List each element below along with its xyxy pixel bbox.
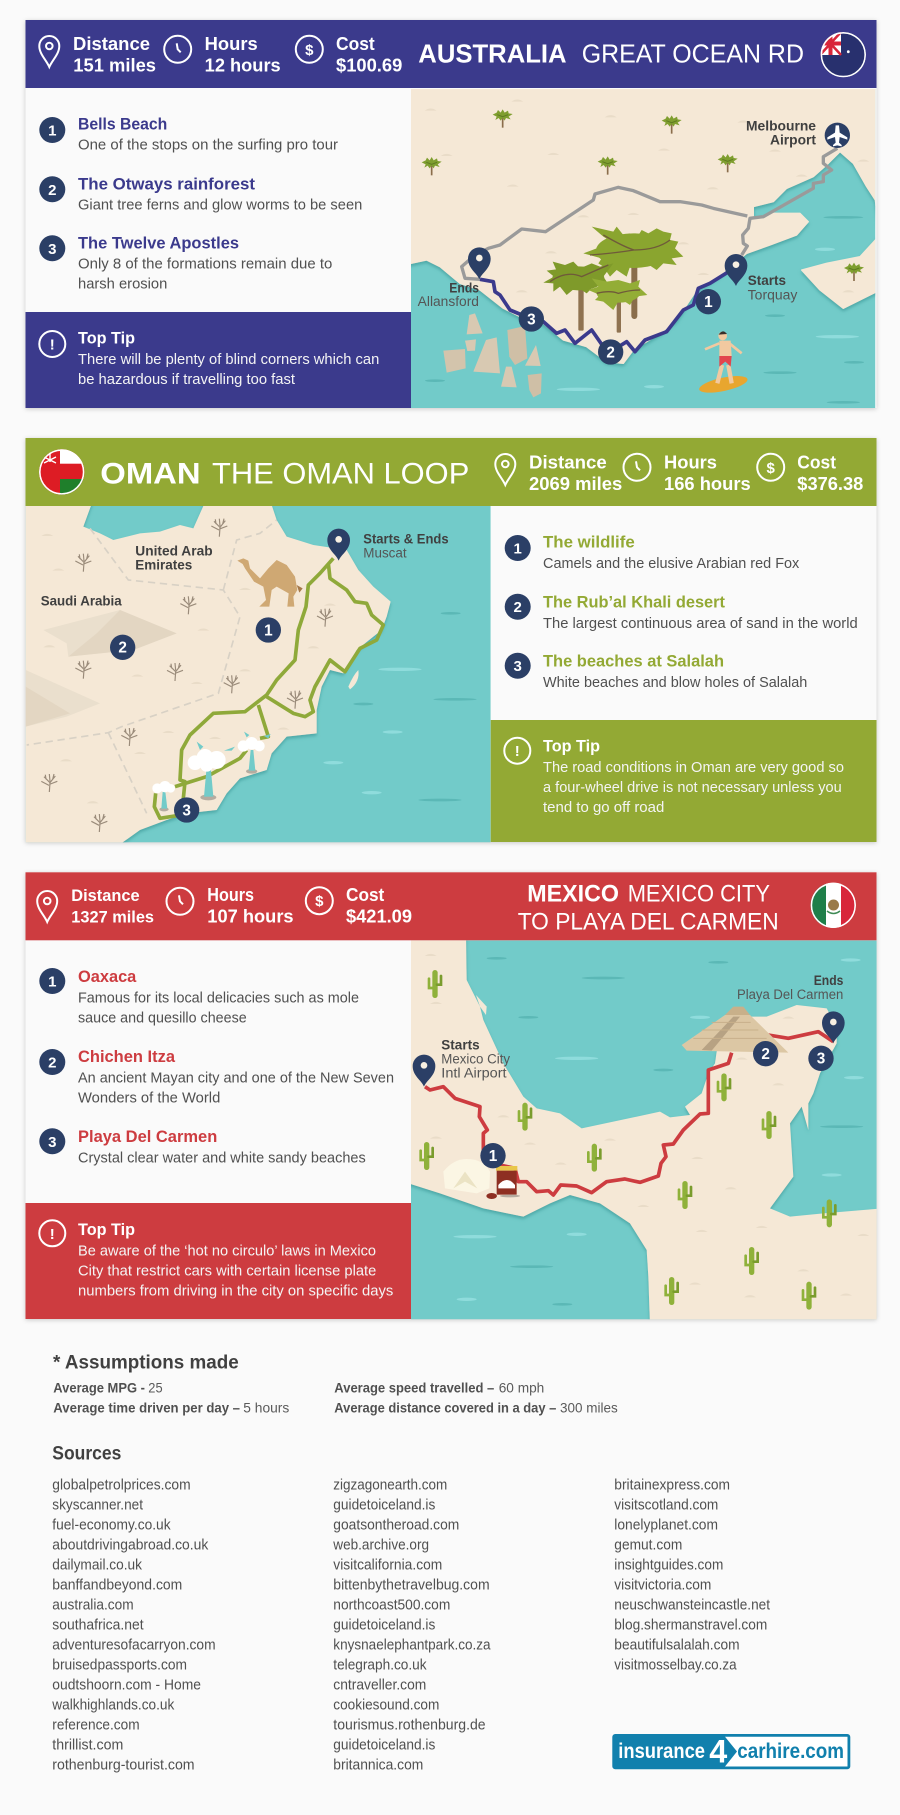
pin: Ends Allansford	[468, 247, 491, 279]
assumption: time driven: Average time driven per day –	[53, 1400, 240, 1416]
sources column 2: web.archive.org	[332, 1537, 429, 1553]
title	[518, 881, 779, 936]
stop 2	[39, 1048, 394, 1106]
illustration: cheese and mole jar	[443, 1159, 520, 1199]
stop 1: Camels and the elusive Arabian red Fox	[543, 556, 800, 572]
top tip: numbers from driving in the city on specific days	[78, 1283, 393, 1299]
flag: Oman	[39, 449, 84, 495]
sources column 2	[332, 1477, 491, 1773]
header bar	[26, 872, 876, 940]
stat: hours	[164, 34, 281, 76]
marker 3	[519, 306, 544, 332]
map labels: Ends	[814, 973, 843, 988]
stop 2: Wonders of the World	[78, 1090, 220, 1106]
stop 3: Playa Del Carmen	[78, 1128, 217, 1146]
top tip: There will be plenty of blind corners which can	[78, 352, 379, 368]
logo: insurance4carhire.com: 4	[709, 1734, 728, 1770]
stop 3: 3	[514, 658, 522, 675]
sources column 3: blog.shermanstravel.com	[614, 1617, 767, 1633]
icon: airport plane	[825, 123, 850, 148]
map labels: Starts	[441, 1037, 480, 1052]
map: Oman loop	[20, 500, 491, 847]
map labels: Intl Airport	[441, 1065, 507, 1080]
stop 1: Bells Beach	[78, 116, 167, 134]
desert dunes	[26, 610, 177, 727]
top tip	[491, 720, 876, 842]
map labels: Allansford	[418, 294, 479, 309]
sources column 1: adventuresofacarryon.com	[52, 1637, 216, 1653]
header bar	[26, 20, 876, 88]
top tip: tend to go off road	[543, 800, 664, 816]
marker 2	[598, 339, 623, 365]
header bar	[26, 438, 876, 506]
marker 3	[808, 1046, 834, 1071]
marker 2	[110, 635, 135, 660]
stop 2: Giant tree ferns and glow worms to be seen	[78, 198, 362, 214]
stop 1: Oaxaca	[78, 968, 137, 986]
sources column 1	[51, 1477, 216, 1773]
stop 3: 3	[48, 1134, 56, 1151]
map labels: Starts & Ends	[363, 531, 449, 546]
stop 2: The Otways rainforest	[78, 176, 256, 194]
marker 1	[696, 289, 721, 314]
sources column 2: cookiesound.com	[333, 1697, 439, 1713]
sources column 1: rothenburg-tourist.com	[52, 1757, 195, 1773]
sources column 1: fuel-economy.co.uk	[52, 1517, 171, 1533]
assumptions	[53, 1352, 618, 1416]
list of stops	[39, 116, 362, 293]
sources column 1: oudtshoorn.com - Home	[52, 1677, 201, 1693]
title: MEXICO CITY	[628, 881, 770, 908]
map labels: Mexico City	[441, 1051, 510, 1066]
illustration: large palm trees	[543, 227, 683, 333]
stat: distance	[39, 34, 156, 76]
road: Great Ocean Road route	[480, 267, 737, 352]
sources column 3	[614, 1477, 770, 1673]
flag: Mexico	[810, 882, 857, 930]
sources column 3: visitmosselbay.co.za	[614, 1657, 737, 1673]
road: Oman loop route	[154, 558, 383, 818]
stop 3: Only 8 of the formations remain due to	[78, 257, 332, 273]
map: Great Ocean Road	[400, 80, 887, 413]
stop 3: White beaches and blow holes of Salalah	[543, 675, 807, 691]
map labels: Ends	[449, 280, 479, 295]
illustration: camel	[237, 558, 303, 607]
panel: Australia	[26, 20, 887, 413]
sources column 3: visitscotland.com	[614, 1497, 718, 1513]
sources column 1: skyscanner.net	[52, 1497, 143, 1513]
cacti	[421, 970, 835, 1310]
stop 1: 1	[48, 974, 56, 990]
stat: cost: $421.09	[346, 907, 412, 927]
sources column 2: guidetoiceland.is	[333, 1617, 435, 1633]
stat: distance: Distance	[529, 452, 607, 472]
sources column 1: southafrica.net	[52, 1617, 144, 1633]
sources column 3: gemut.com	[614, 1537, 682, 1553]
top tip	[26, 1203, 411, 1319]
title: TO PLAYA DEL CARMEN	[518, 909, 779, 936]
marker 3	[174, 797, 199, 823]
map labels: Starts	[748, 273, 786, 288]
sources column 3: britainexpress.com	[614, 1477, 730, 1493]
stop 1: One of the stops on the surfing pro tour	[78, 138, 338, 154]
sources column 2: guidetoiceland.is	[333, 1497, 435, 1513]
top tip	[26, 312, 411, 408]
pin: Starts Mexico City	[413, 1055, 435, 1087]
stop 1	[505, 533, 800, 572]
sources column 2: knysnaelephantpark.co.za	[333, 1637, 491, 1653]
logo: insurance4carhire.com: carhire.com	[737, 1740, 844, 1763]
stop 2: Chichen Itza	[78, 1048, 176, 1066]
marker 1: 1	[489, 1148, 498, 1165]
stop 1	[39, 116, 338, 154]
sources column 2: tourismus.rothenburg.de	[333, 1717, 486, 1733]
sources column 2: cntraveller.com	[333, 1677, 426, 1693]
map labels: Airport	[770, 133, 817, 148]
map labels	[41, 531, 449, 608]
marker 1	[256, 617, 281, 643]
assumption: speed: Average speed travelled –	[334, 1380, 494, 1396]
assumption: time driven: 5 hours	[243, 1400, 289, 1416]
sources column 3: insightguides.com	[614, 1557, 723, 1573]
stop 3	[505, 652, 807, 691]
assumption: MPG: Average MPG -	[53, 1380, 145, 1396]
pin: Muscat	[327, 529, 350, 561]
stop 2: 2	[48, 1054, 56, 1072]
map: Mexico City to Playa Del Carmen	[403, 933, 883, 1327]
top tip: Top Tip	[78, 330, 135, 348]
sources column 3: lonelyplanet.com	[614, 1517, 718, 1533]
marker 2	[753, 1041, 778, 1066]
stop 3: Crystal clear water and white sandy beaches	[78, 1150, 366, 1166]
marker 1: 1	[264, 622, 273, 639]
marker 1: 1	[704, 294, 713, 311]
top tip: City that restrict cars with certain license plate	[78, 1263, 376, 1279]
stop 2: An ancient Mayan city and one of the New Seven	[78, 1070, 394, 1086]
stat: distance	[495, 452, 622, 494]
stop 2: The largest continuous area of sand in the world	[543, 616, 858, 632]
sources column 2: northcoast500.com	[333, 1597, 450, 1613]
title: OMAN	[100, 458, 201, 491]
sources column 2: visitcalifornia.com	[333, 1557, 442, 1573]
marker 2: 2	[118, 640, 127, 657]
title: GREAT OCEAN RD	[582, 39, 804, 69]
road: alternate route	[462, 148, 837, 279]
sources column 3: beautifulsalalah.com	[614, 1637, 740, 1653]
title	[418, 39, 804, 69]
stop 3	[39, 1128, 366, 1166]
stop 3: The beaches at Salalah	[543, 652, 724, 670]
sources column 3: neuschwansteincastle.net	[614, 1597, 770, 1613]
stop 3	[39, 235, 332, 293]
stat: cost: Cost	[346, 885, 384, 905]
stat: hours: 166 hours	[664, 474, 751, 494]
assumption: speed: 60 mph	[499, 1380, 544, 1396]
stat: cost	[306, 885, 412, 927]
stop 2	[39, 176, 362, 214]
road: Mexico route	[425, 1032, 833, 1195]
title: AUSTRALIA	[418, 39, 567, 69]
stat: distance: Distance	[73, 34, 150, 54]
stat: distance: 2069 miles	[529, 474, 622, 494]
stat: hours	[166, 885, 294, 927]
sources column 1: australia.com	[52, 1597, 134, 1613]
sources column 2: telegraph.co.uk	[333, 1657, 427, 1673]
sources column 1: dailymail.co.uk	[52, 1557, 143, 1573]
stop 1	[39, 968, 359, 1026]
assumption: distance: 300 miles	[560, 1400, 618, 1416]
panel: Mexico	[26, 872, 883, 1327]
sources column 1: walkhighlands.co.uk	[51, 1697, 175, 1713]
flag: Australia	[820, 32, 866, 78]
panel: Oman	[20, 438, 876, 847]
stop 2: The Rub’al Khali desert	[543, 593, 725, 611]
assumption: MPG: 25	[148, 1380, 163, 1396]
logo: insurance4carhire.com	[612, 1734, 850, 1770]
assumption: distance: Average distance covered in a day –	[334, 1400, 556, 1416]
top tip: a four-wheel drive is not necessary unless you	[543, 780, 842, 796]
map labels: Melbourne	[746, 119, 816, 134]
stat: cost	[296, 34, 402, 76]
pin: Ends Playa Del Carmen	[822, 1011, 845, 1043]
stop 1: 1	[514, 540, 522, 558]
sources column 2: zigzagonearth.com	[333, 1477, 447, 1493]
stat: cost: Cost	[797, 452, 836, 472]
sources column 2: bittenbythetravelbug.com	[333, 1577, 490, 1593]
stat: hours: Hours	[205, 34, 258, 54]
stop 1: Famous for its local delicacies such as mole	[78, 990, 359, 1006]
small palm trees	[422, 109, 864, 281]
sources column 1: aboutdrivingabroad.co.uk	[52, 1537, 209, 1553]
sources column 1: banffandbeyond.com	[52, 1577, 182, 1593]
top tip: Top Tip	[78, 1221, 135, 1239]
sources column 1: bruisedpassports.com	[52, 1657, 187, 1673]
illustration: twelve apostles rocks	[443, 313, 542, 397]
stop 1: The wildlife	[543, 533, 635, 551]
title: MEXICO	[527, 881, 619, 908]
marker 1	[480, 1143, 506, 1168]
title: THE OMAN LOOP	[212, 458, 469, 491]
pin: Starts Torquay	[725, 254, 747, 286]
map labels: Muscat	[363, 545, 407, 560]
title	[100, 458, 469, 491]
desert shrubs	[41, 519, 333, 832]
marker 3: 3	[817, 1051, 825, 1068]
stop 3: 3	[48, 241, 56, 258]
marker 3: 3	[527, 311, 536, 328]
sources column 2: britannica.com	[333, 1757, 423, 1773]
stop 2: 2	[514, 599, 522, 616]
map labels	[418, 119, 817, 309]
stat: cost	[757, 452, 863, 494]
map labels	[441, 973, 843, 1080]
stat: distance: 1327 miles	[71, 908, 154, 927]
top tip: Top Tip	[543, 738, 600, 756]
sources column 2: guidetoiceland.is	[333, 1737, 435, 1753]
list of stops	[505, 533, 858, 691]
stop 2: 2	[48, 182, 56, 199]
stat: hours	[624, 452, 751, 494]
stat: cost: $100.69	[336, 56, 402, 76]
top tip: be hazardous if travelling too fast	[78, 372, 295, 388]
sources column 3: visitvictoria.com	[614, 1577, 711, 1593]
illustration: surfer	[698, 331, 749, 396]
top tip: The road conditions in Oman are very good so	[543, 760, 844, 776]
map labels: Playa Del Carmen	[737, 987, 843, 1002]
map labels: Emirates	[135, 558, 192, 573]
stop 3: harsh erosion	[78, 277, 167, 293]
sources column 2: goatsontheroad.com	[333, 1517, 459, 1533]
sources column 1: thrillist.com	[52, 1737, 123, 1753]
country borders	[27, 520, 277, 813]
stat: cost: $376.38	[797, 474, 863, 494]
marker 3: 3	[182, 802, 191, 819]
map labels: United Arab	[135, 544, 213, 559]
stop 3: The Twelve Apostles	[78, 235, 239, 253]
stop 1: 1	[48, 122, 56, 140]
sources column 1: reference.com	[52, 1717, 140, 1733]
stat: distance: Distance	[71, 886, 140, 905]
list of stops	[39, 968, 394, 1166]
marker 2: 2	[761, 1046, 770, 1063]
logo: insurance4carhire.com: insurance	[618, 1740, 705, 1763]
stat: hours: Hours	[664, 452, 717, 472]
stat: distance: 151 miles	[73, 56, 156, 76]
stat: cost: Cost	[336, 34, 375, 54]
illustration: Mayan pyramid	[682, 1007, 788, 1053]
stop 2	[505, 593, 858, 632]
marker 2: 2	[606, 344, 615, 361]
map labels: Torquay	[748, 287, 798, 302]
stat: distance	[37, 886, 154, 927]
top tip: Be aware of the ‘hot no circulo’ laws in Mexico	[78, 1243, 376, 1259]
stop 1: sauce and quesillo cheese	[78, 1010, 247, 1026]
stat: hours: 12 hours	[205, 56, 281, 76]
stat: hours: Hours	[207, 885, 254, 905]
assumptions heading: * Assumptions made	[53, 1352, 239, 1373]
stat: hours: 107 hours	[207, 907, 294, 927]
sources column 1: globalpetrolprices.com	[52, 1477, 191, 1493]
sources heading: Sources	[52, 1443, 121, 1464]
map labels: Saudi Arabia	[41, 593, 122, 608]
illustration: blowholes	[152, 732, 271, 811]
